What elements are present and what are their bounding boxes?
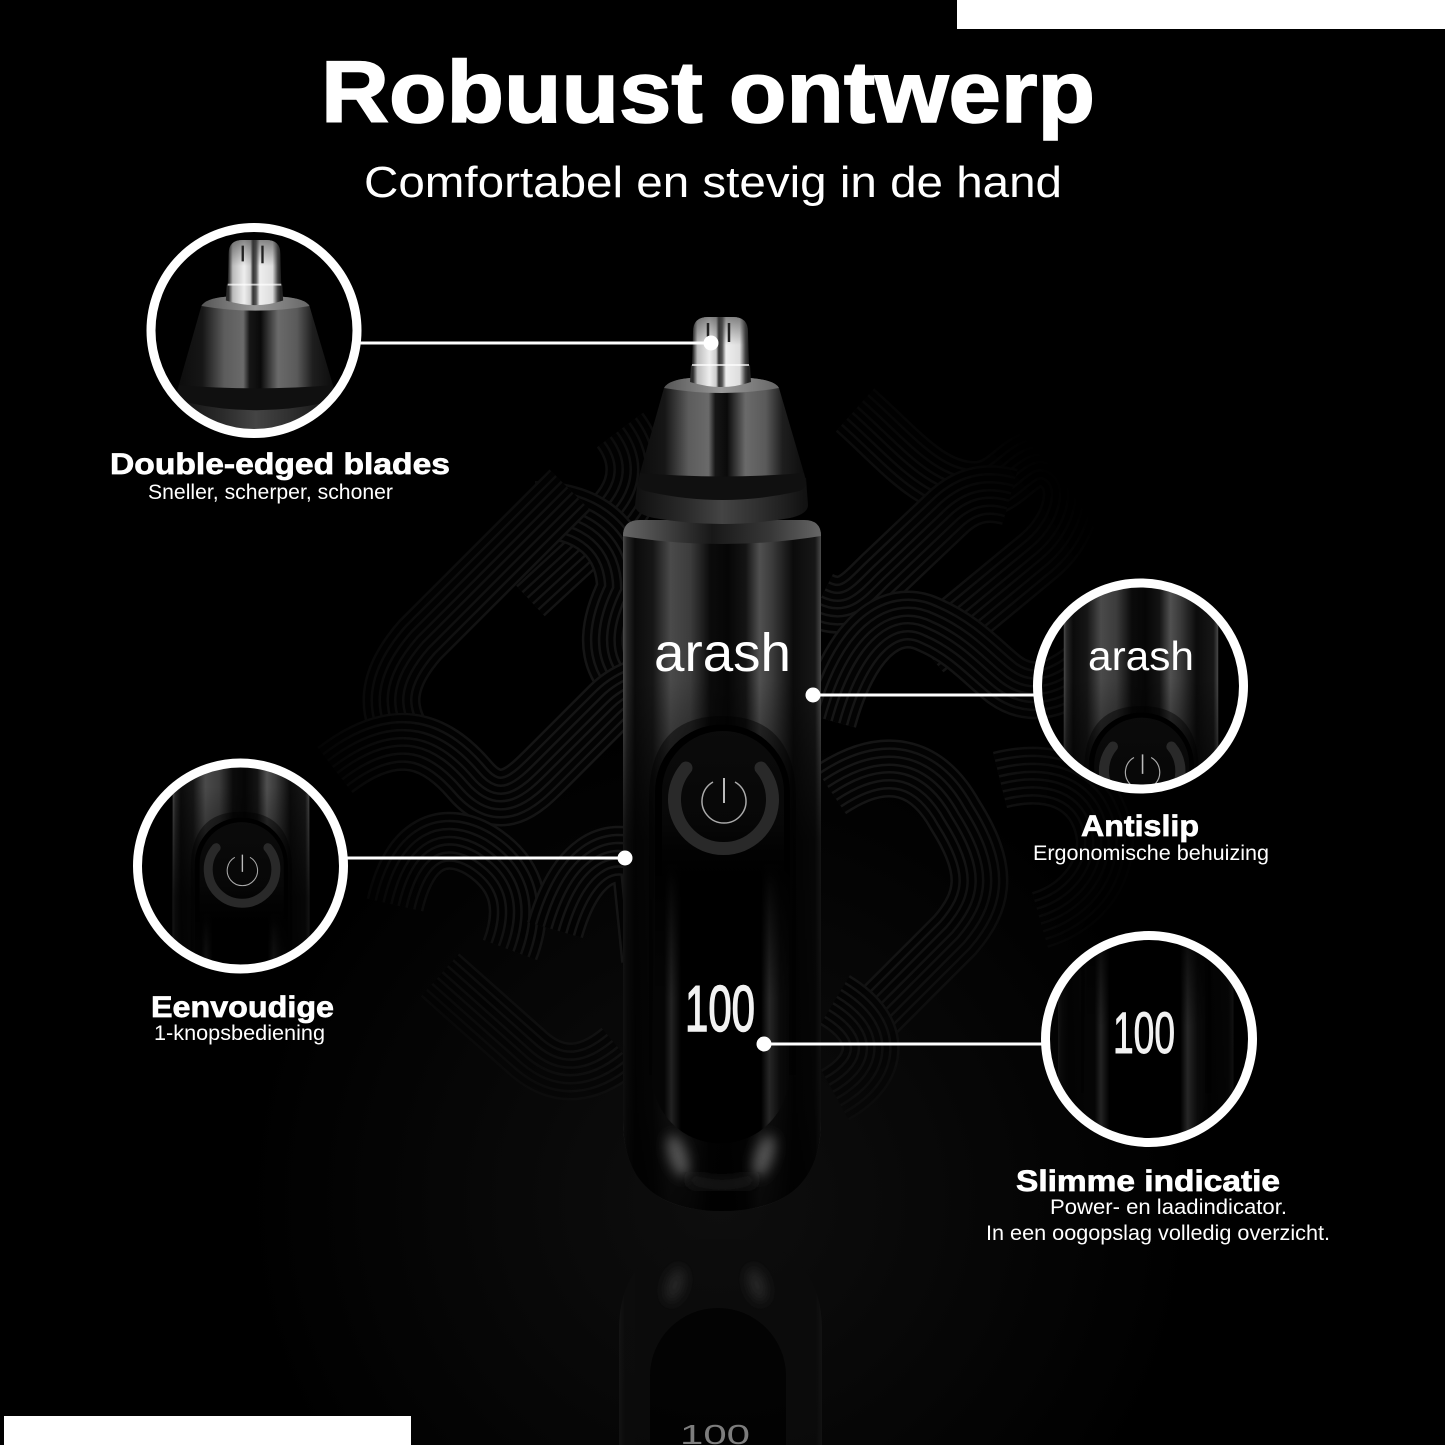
title: Robuust ontwerp <box>321 44 1095 141</box>
label: button: 1-knopsbediening <box>154 1022 325 1045</box>
display ring <box>1046 936 1252 1142</box>
label: blades: Double-edged blades <box>110 448 450 481</box>
product reflection <box>619 1239 822 1445</box>
label: display <box>986 1165 1330 1245</box>
label: blades: Sneller, scherper, schoner <box>148 481 393 504</box>
display zoom content <box>1058 947 1234 1132</box>
label: button: Eenvoudige <box>151 991 334 1024</box>
button zoom content <box>172 768 310 960</box>
connector: grip <box>806 688 1035 702</box>
product: trimmer <box>623 317 821 1211</box>
grip ring <box>1038 583 1244 789</box>
floor glow <box>0 720 1445 1445</box>
subtitle: Comfortabel en stevig in de hand <box>364 158 1062 207</box>
connector: display <box>756 1036 1044 1052</box>
brand logo: arash <box>654 623 791 683</box>
label: grip: Antislip <box>1081 810 1199 843</box>
connector: button <box>346 850 632 866</box>
button ring <box>138 763 344 969</box>
grip zoom content: arash <box>1088 633 1194 679</box>
callout: grip <box>1033 578 1248 794</box>
label: grip <box>1033 810 1269 865</box>
label: display: In een oogopslag volledig overzicht. <box>986 1222 1330 1245</box>
label: button <box>151 991 334 1045</box>
label: grip: Ergonomische behuizing <box>1033 842 1269 865</box>
label: display: Power- en laadindicator. <box>1050 1196 1287 1219</box>
callout: display <box>1041 931 1257 1147</box>
display zoom content: 100 <box>1113 1001 1175 1066</box>
callout: button <box>133 758 348 974</box>
blades ring <box>151 228 357 434</box>
grip zoom content <box>1064 588 1218 784</box>
label: blades <box>110 448 450 504</box>
connector: blades <box>360 336 718 350</box>
bottom white bar <box>4 1416 411 1445</box>
callout: blades <box>151 228 357 434</box>
blades zoom content <box>174 240 337 433</box>
top white bar <box>957 0 1445 29</box>
label: display: Slimme indicatie <box>1016 1165 1280 1198</box>
background woven line pattern <box>358 413 1081 1048</box>
display digits: 100 <box>685 972 755 1045</box>
